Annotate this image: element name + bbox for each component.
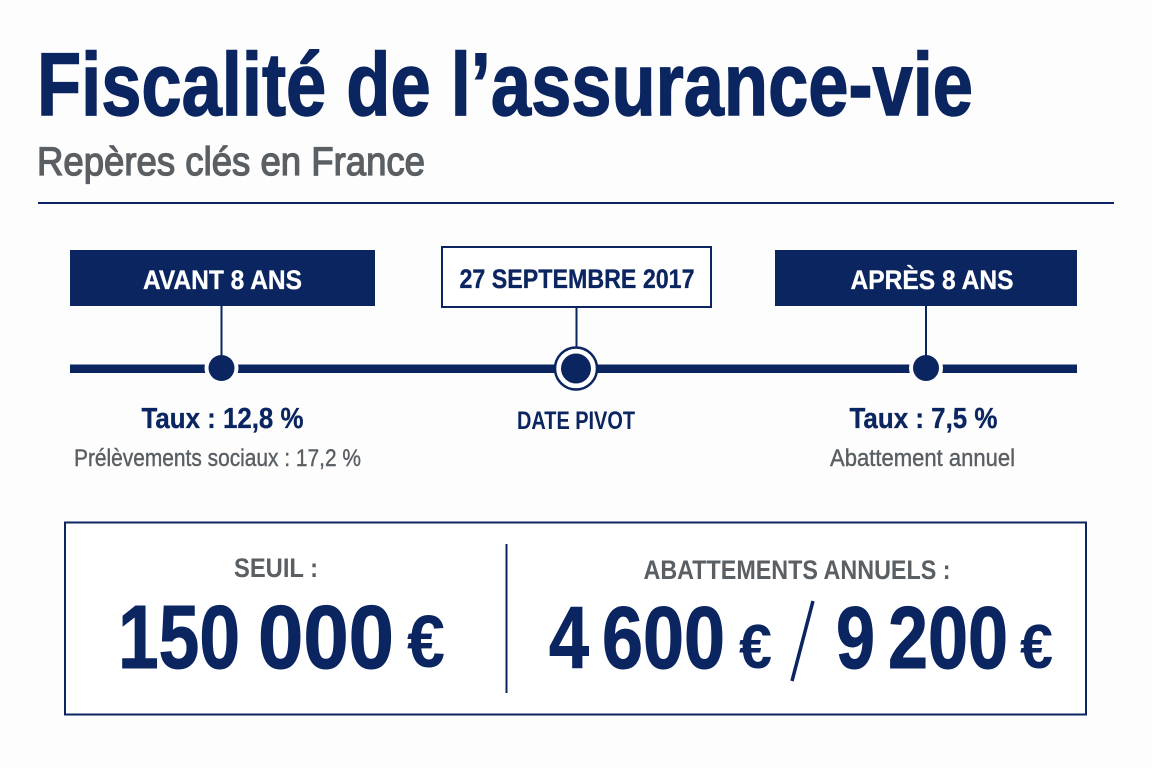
seuil value: € [407,600,445,683]
label: date pivot box [442,247,711,307]
subtitle: Repères clés en France [37,140,425,184]
abattements values: 600 [602,588,725,687]
timeline axis [70,364,1077,373]
label: date pivot box: 27 SEPTEMBRE 2017 [460,264,694,294]
connector and marker: après 8 ans [909,306,943,385]
text: après 8 ans rate: Abattement annuel [830,445,1015,472]
seuil value [118,588,445,688]
label: avant 8 ans: AVANT 8 ANS [143,265,302,295]
seuil label: SEUIL : [234,553,318,583]
text: après 8 ans rate: Taux : 7,5 % [850,403,998,435]
connector and marker: avant 8 ans [204,306,238,385]
panel: seuil et abattements [65,522,1086,714]
seuil value: 000 [258,588,394,688]
label: après 8 ans [775,250,1077,306]
abattements values: 4 [549,588,589,687]
timeline [70,247,1077,390]
abattements values: € [1020,613,1053,682]
text: date pivot: DATE PIVOT [517,407,635,435]
text: avant 8 ans rate [74,403,361,472]
abattements label: ABATTEMENTS ANNUELS : [644,555,950,585]
abattements values: 9 [836,588,875,687]
abattements values: 200 [888,588,1008,687]
connector and marker: date pivot [555,307,597,390]
text: avant 8 ans rate: Taux : 12,8 % [142,403,304,435]
seuil value: 150 [118,588,240,688]
text: après 8 ans rate [830,403,1015,472]
label: avant 8 ans [70,250,375,306]
label: après 8 ans: APRÈS 8 ANS [850,264,1014,295]
abattements values: € [739,613,772,682]
text: avant 8 ans rate: Prélèvements sociaux : 17,2 % [74,445,361,472]
abattements values [549,588,1053,687]
